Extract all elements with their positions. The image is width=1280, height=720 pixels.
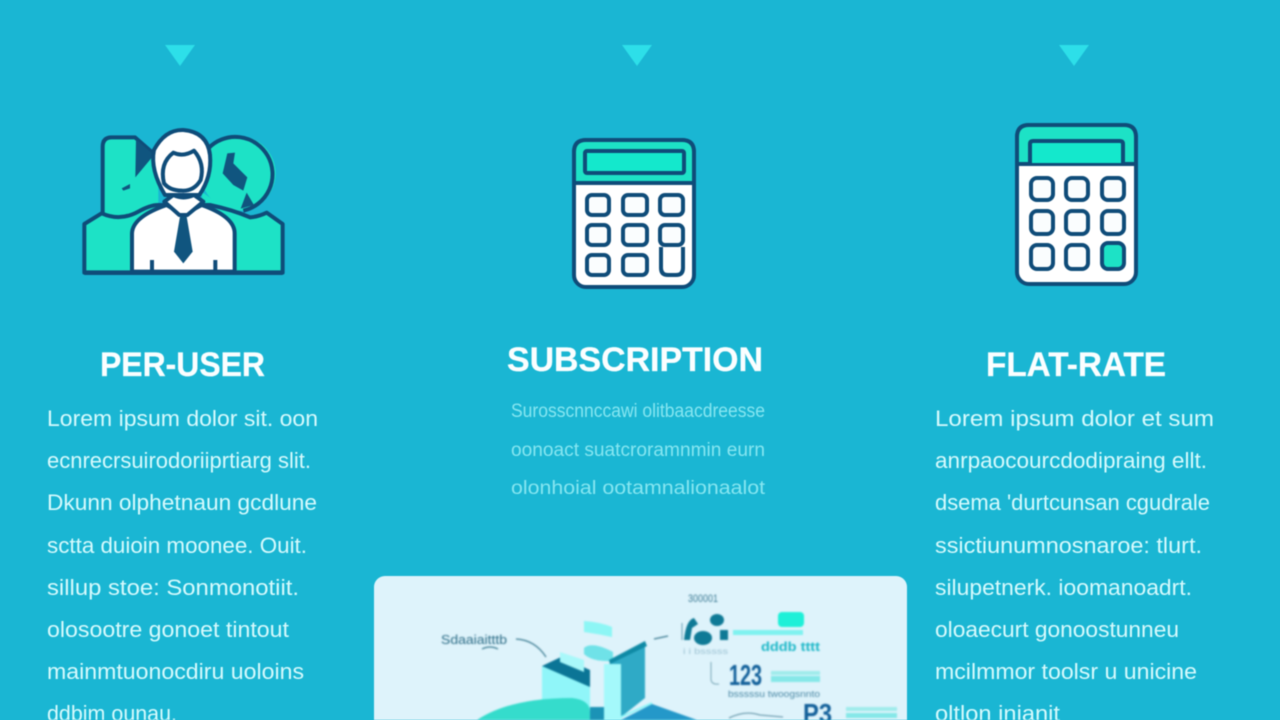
- chart: teal bar and chat bubble: dddb tttt: [761, 639, 821, 654]
- text block: subscription description: Surosscnnccawi olitbaacdreesse: [511, 401, 765, 422]
- chart: teal bar and chat bubble: i i bsssss: [683, 647, 728, 656]
- statistic: 123: [711, 660, 820, 699]
- text block: flat-rate description: [935, 406, 1214, 720]
- icon: calculator flat-rate: [1017, 125, 1136, 284]
- text block: per-user description: ecnrecrsuirodoriiprtiarg slit.: [47, 448, 311, 473]
- chart: teal bar and chat bubble: [683, 612, 821, 656]
- marker: subscription: [622, 45, 652, 66]
- text block: subscription description: olonhoial ootamnalionaalot: [511, 478, 766, 499]
- label: top title: 300001: [688, 593, 718, 605]
- statistic: 123: 123: [729, 660, 762, 692]
- text block: flat-rate description: anrpaocourcdodipraing ellt.: [935, 448, 1207, 473]
- heading: per-user: PER-USER: [100, 346, 265, 384]
- marker: flat-rate: [1059, 45, 1089, 66]
- text block: per-user description: olosootre gonoet tintout: [47, 617, 289, 642]
- text block: flat-rate description: Lorem ipsum dolor et sum: [935, 406, 1214, 431]
- text block: flat-rate description: mcilmmor toolsr u unicine: [935, 659, 1197, 684]
- text block: flat-rate description: silupetnerk. ioomanoadrt.: [935, 575, 1192, 600]
- heading: flat-rate: FLAT-RATE: [986, 346, 1166, 384]
- statistic: 123: bsssssu twoogsnnto: [728, 689, 820, 699]
- text block: per-user description: Lorem ipsum dolor sit. oon: [47, 406, 318, 431]
- text block: per-user description: Dkunn olphetnaun gcdlune: [47, 490, 317, 515]
- label: left callout: [441, 632, 546, 657]
- text block: per-user description: [47, 406, 318, 720]
- text block: flat-rate description: dsema 'durtcunsan cgudrale: [935, 490, 1210, 515]
- heading: subscription: SUBSCRIPTION: [507, 341, 763, 379]
- text block: flat-rate description: oloaecurt gonoostunneu: [935, 617, 1179, 642]
- text block: flat-rate description: ssictiunumnosnaroe: tlurt.: [935, 533, 1202, 558]
- text block: per-user description: mainmtuonocdiru uoloins: [47, 659, 304, 684]
- text block: per-user description: sctta duioin moonee. Ouit.: [47, 533, 307, 558]
- icon: people cluster: [654, 614, 728, 645]
- marker: per-user: [165, 45, 195, 66]
- icon: users group: [84, 130, 283, 273]
- text block: per-user description: sillup stoe: Sonmonotiit.: [47, 575, 299, 600]
- chart: isometric blocks: [477, 621, 697, 720]
- label: left callout: Sdaaiaitttb: [441, 632, 507, 647]
- icon: calculator subscription: [574, 140, 694, 287]
- text block: subscription description: [511, 401, 766, 499]
- statistic: P3: [729, 698, 897, 720]
- text block: subscription description: oonoact suatcroramnmin eurn: [511, 440, 765, 461]
- panel: illustration card: [374, 576, 907, 720]
